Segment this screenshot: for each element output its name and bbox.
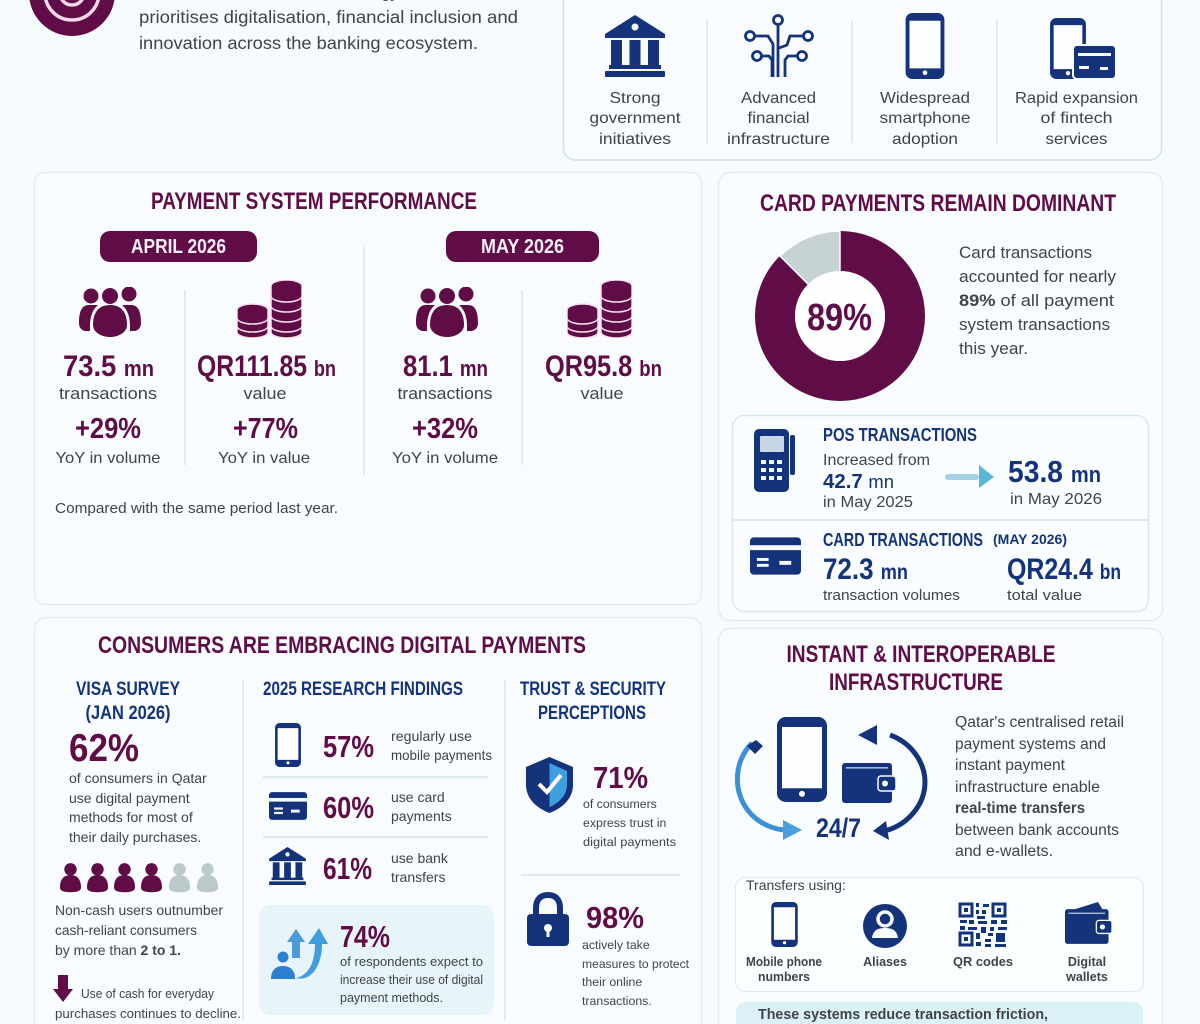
item: aliases: Aliases xyxy=(863,955,907,969)
description: payment systems and xyxy=(955,736,1106,753)
column: Visa survey xyxy=(53,679,241,1021)
stat: May value xyxy=(545,280,662,403)
POS text xyxy=(823,425,977,511)
panel: card payments xyxy=(718,172,1162,620)
POS text: POS TRANSACTIONS xyxy=(823,425,977,445)
description: infrastructure enable xyxy=(955,779,1100,796)
POS text: 42.7 mn xyxy=(823,471,894,493)
icon: card xyxy=(750,537,801,575)
icon: target emblem xyxy=(29,0,115,36)
stat: May transactions xyxy=(392,286,498,467)
row: mobile payments xyxy=(276,724,492,766)
stat: April value xyxy=(197,280,336,467)
POS text: in May 2025 xyxy=(823,494,913,511)
item: mobile phone numbers: Mobile phone xyxy=(746,955,822,969)
callout: 74% xyxy=(259,905,494,1015)
footnote: Compared with the same period last year. xyxy=(55,500,338,517)
donut description: Card transactions xyxy=(959,243,1092,262)
column: trust and security: their online xyxy=(582,975,642,989)
donut chart: 89% xyxy=(807,297,872,339)
column: trust and security: measures to protect xyxy=(582,957,690,971)
box: transfers using xyxy=(736,877,1144,992)
callout: reduced friction xyxy=(736,1002,1143,1024)
heading: CONSUMERS ARE EMBRACING DIGITAL PAYMENTS xyxy=(98,632,586,659)
donut description: system transactions xyxy=(959,315,1110,334)
label: advanced financial infrastructure: infrastructure xyxy=(727,131,830,148)
stat: April transactions xyxy=(56,286,161,467)
donut description: 89% of all payment xyxy=(959,291,1114,310)
stat: April transactions: YoY in volume xyxy=(56,450,161,467)
column: Visa survey: methods for most of xyxy=(69,809,193,825)
column: trust and security: actively take xyxy=(582,938,650,952)
column: research findings: 2025 RESEARCH FINDINGS xyxy=(263,679,463,700)
donut description: accounted for nearly xyxy=(959,267,1117,286)
POS text: Increased from xyxy=(823,452,930,469)
label: advanced financial infrastructure: Advanced xyxy=(741,90,816,107)
POS result: in May 2026 xyxy=(1010,491,1102,508)
label: strong government initiatives: Strong xyxy=(610,90,660,107)
label: widespread smartphone adoption: Widespread xyxy=(880,90,970,107)
column: Visa survey: by more than 2 to 1. xyxy=(55,942,181,958)
POS result: 53.8 mn xyxy=(1008,454,1101,489)
intro text xyxy=(139,0,518,53)
row: bank transfers: use bank xyxy=(391,850,449,866)
column: trust and security: of consumers xyxy=(583,797,657,811)
item: QR codes: QR codes xyxy=(953,955,1013,969)
callout: reduced friction: These systems reduce transaction friction, xyxy=(758,1007,1048,1023)
description: real-time transfers xyxy=(955,800,1085,817)
box: POS and card stats xyxy=(732,416,1148,612)
row: card payments xyxy=(269,789,452,825)
item: digital wallets: Digital xyxy=(1068,955,1106,969)
card stats text: total value xyxy=(1007,587,1082,604)
column: Visa survey: (JAN 2026) xyxy=(86,703,170,724)
stat: April transactions: 73.5 mn xyxy=(63,350,154,383)
heading: PAYMENT SYSTEM PERFORMANCE xyxy=(151,188,477,215)
item: QR codes xyxy=(953,902,1013,969)
panel: consumers embracing digital payments xyxy=(34,618,702,1024)
label: rapid expansion of fintech services: of fintech xyxy=(1040,110,1112,127)
stat: May transactions: +32% xyxy=(412,413,478,445)
illustration: 24/7 transfers: 24/7 xyxy=(816,813,861,843)
column: Visa survey: Use of cash for everyday xyxy=(81,986,214,1001)
stat: April transactions: transactions xyxy=(59,384,157,403)
row: card payments: 60% xyxy=(323,790,374,825)
intro text: innovation across the banking ecosystem. xyxy=(139,33,478,53)
row: mobile payments: 57% xyxy=(323,729,374,764)
label: advanced financial infrastructure xyxy=(727,90,830,148)
column: trust and security: 71% xyxy=(593,760,648,795)
icon: smartphone xyxy=(908,15,942,77)
card stats text: QR24.4 bn xyxy=(1007,553,1121,586)
description: between bank accounts xyxy=(955,822,1119,839)
icon row: people xyxy=(60,863,218,892)
donut chart xyxy=(775,231,905,381)
column: Visa survey: VISA SURVEY xyxy=(76,679,180,700)
callout: 74%: increase their use of digital xyxy=(340,973,483,987)
stat: April value: YoY in value xyxy=(218,450,310,467)
description: and e-wallets. xyxy=(955,843,1053,860)
row: card payments: use card xyxy=(391,789,445,805)
item: aliases xyxy=(863,904,907,969)
label: strong government initiatives: government xyxy=(590,110,681,127)
stat: April value: +77% xyxy=(233,413,298,445)
illustration: 24/7 transfers xyxy=(737,720,925,843)
card stats text: (MAY 2026) xyxy=(993,531,1067,547)
row: bank transfers xyxy=(269,847,449,886)
panel: payment system performance xyxy=(34,172,702,604)
heading: INFRASTRUCTURE xyxy=(829,669,1003,696)
box: transfers using: Transfers using: xyxy=(746,877,846,893)
stat: April transactions: +29% xyxy=(75,413,141,445)
label: widespread smartphone adoption: smartphone xyxy=(880,110,971,127)
donut description xyxy=(959,243,1117,358)
description xyxy=(955,714,1124,860)
icon: bank xyxy=(605,15,665,77)
label: widespread smartphone adoption xyxy=(880,90,971,148)
row: mobile payments: mobile payments xyxy=(391,747,492,763)
row: mobile payments: regularly use xyxy=(391,728,472,744)
heading: INSTANT & INTEROPERABLE xyxy=(786,641,1056,668)
label: rapid expansion of fintech services: Rapid expansion xyxy=(1015,90,1138,107)
column: trust and security: transactions. xyxy=(582,994,652,1008)
description: instant payment xyxy=(955,757,1066,774)
arrow xyxy=(945,465,994,488)
stat: May value: QR95.8 bn xyxy=(545,350,662,383)
card stats text: 72.3 mn xyxy=(823,553,908,586)
column: trust and security: 98% xyxy=(586,900,644,935)
card stats text: CARD TRANSACTIONS xyxy=(823,530,983,550)
column: research findings xyxy=(259,679,494,1015)
pill: April 2026 xyxy=(100,231,257,262)
card stats text xyxy=(823,530,1121,604)
item: mobile phone numbers: numbers xyxy=(758,970,810,984)
POS result xyxy=(1008,454,1102,508)
label: rapid expansion of fintech services xyxy=(1015,90,1138,148)
heading xyxy=(786,641,1056,696)
intro text: prioritises digitalisation, financial inclusion and xyxy=(139,7,518,27)
label: rapid expansion of fintech services: services xyxy=(1046,131,1108,148)
callout: 74%: 74% xyxy=(340,919,390,954)
callout: 74%: of respondents expect to xyxy=(340,955,483,969)
icon: down arrow xyxy=(53,975,73,1002)
label: advanced financial infrastructure: financial xyxy=(748,110,810,127)
heading: CARD PAYMENTS REMAIN DOMINANT xyxy=(760,190,1116,217)
description: Qatar's centralised retail xyxy=(955,714,1124,731)
column: Visa survey: their daily purchases. xyxy=(69,829,201,845)
callout: 74%: payment methods. xyxy=(340,991,443,1005)
label: strong government initiatives xyxy=(590,90,681,148)
card stats text: transaction volumes xyxy=(823,587,960,604)
stat: May transactions: 81.1 mn xyxy=(403,350,488,383)
stat: May transactions: transactions xyxy=(398,384,492,403)
pill: May 2026: MAY 2026 xyxy=(481,236,564,258)
column: Visa survey: purchases continues to decline. xyxy=(55,1006,241,1021)
icon: POS terminal xyxy=(754,429,795,492)
row: card payments: payments xyxy=(391,808,452,824)
column: trust and security: digital payments xyxy=(583,835,676,849)
row: bank transfers: 61% xyxy=(323,851,372,886)
stat: May transactions: YoY in volume xyxy=(392,450,498,467)
column: trust and security: PERCEPTIONS xyxy=(538,703,646,724)
label: widespread smartphone adoption: adoption xyxy=(892,131,958,148)
column: Visa survey: of consumers in Qatar xyxy=(69,770,207,786)
column: trust and security: TRUST & SECURITY xyxy=(520,679,666,700)
column: trust and security xyxy=(520,679,690,1008)
column: Visa survey: Non-cash users outnumber xyxy=(55,902,223,918)
stat: April value: QR111.85 bn xyxy=(197,350,336,383)
label: strong government initiatives: initiatives xyxy=(599,131,671,148)
column: Visa survey: cash-reliant consumers xyxy=(55,922,197,938)
icon: padlock xyxy=(527,895,569,946)
stat: May value: value xyxy=(580,384,624,403)
pill: April 2026: APRIL 2026 xyxy=(131,236,226,258)
icon: shield xyxy=(526,757,573,813)
icon: phone and card xyxy=(1052,20,1116,79)
pill: May 2026 xyxy=(446,231,599,262)
icon: circuit xyxy=(746,16,812,77)
icon: growth arrows xyxy=(271,928,328,979)
item: digital wallets: wallets xyxy=(1065,970,1108,984)
column: Visa survey: use digital payment xyxy=(69,790,190,806)
item: mobile phone numbers xyxy=(746,903,822,984)
column: trust and security: express trust in xyxy=(583,816,667,830)
item: digital wallets xyxy=(1065,902,1112,984)
panel: instant and interoperable infrastructure xyxy=(718,628,1162,1024)
row: bank transfers: transfers xyxy=(391,869,445,885)
panel: drivers xyxy=(564,0,1162,160)
column: Visa survey: 62% xyxy=(69,727,139,770)
stat: April value: value xyxy=(244,384,286,403)
donut description: this year. xyxy=(959,339,1028,358)
